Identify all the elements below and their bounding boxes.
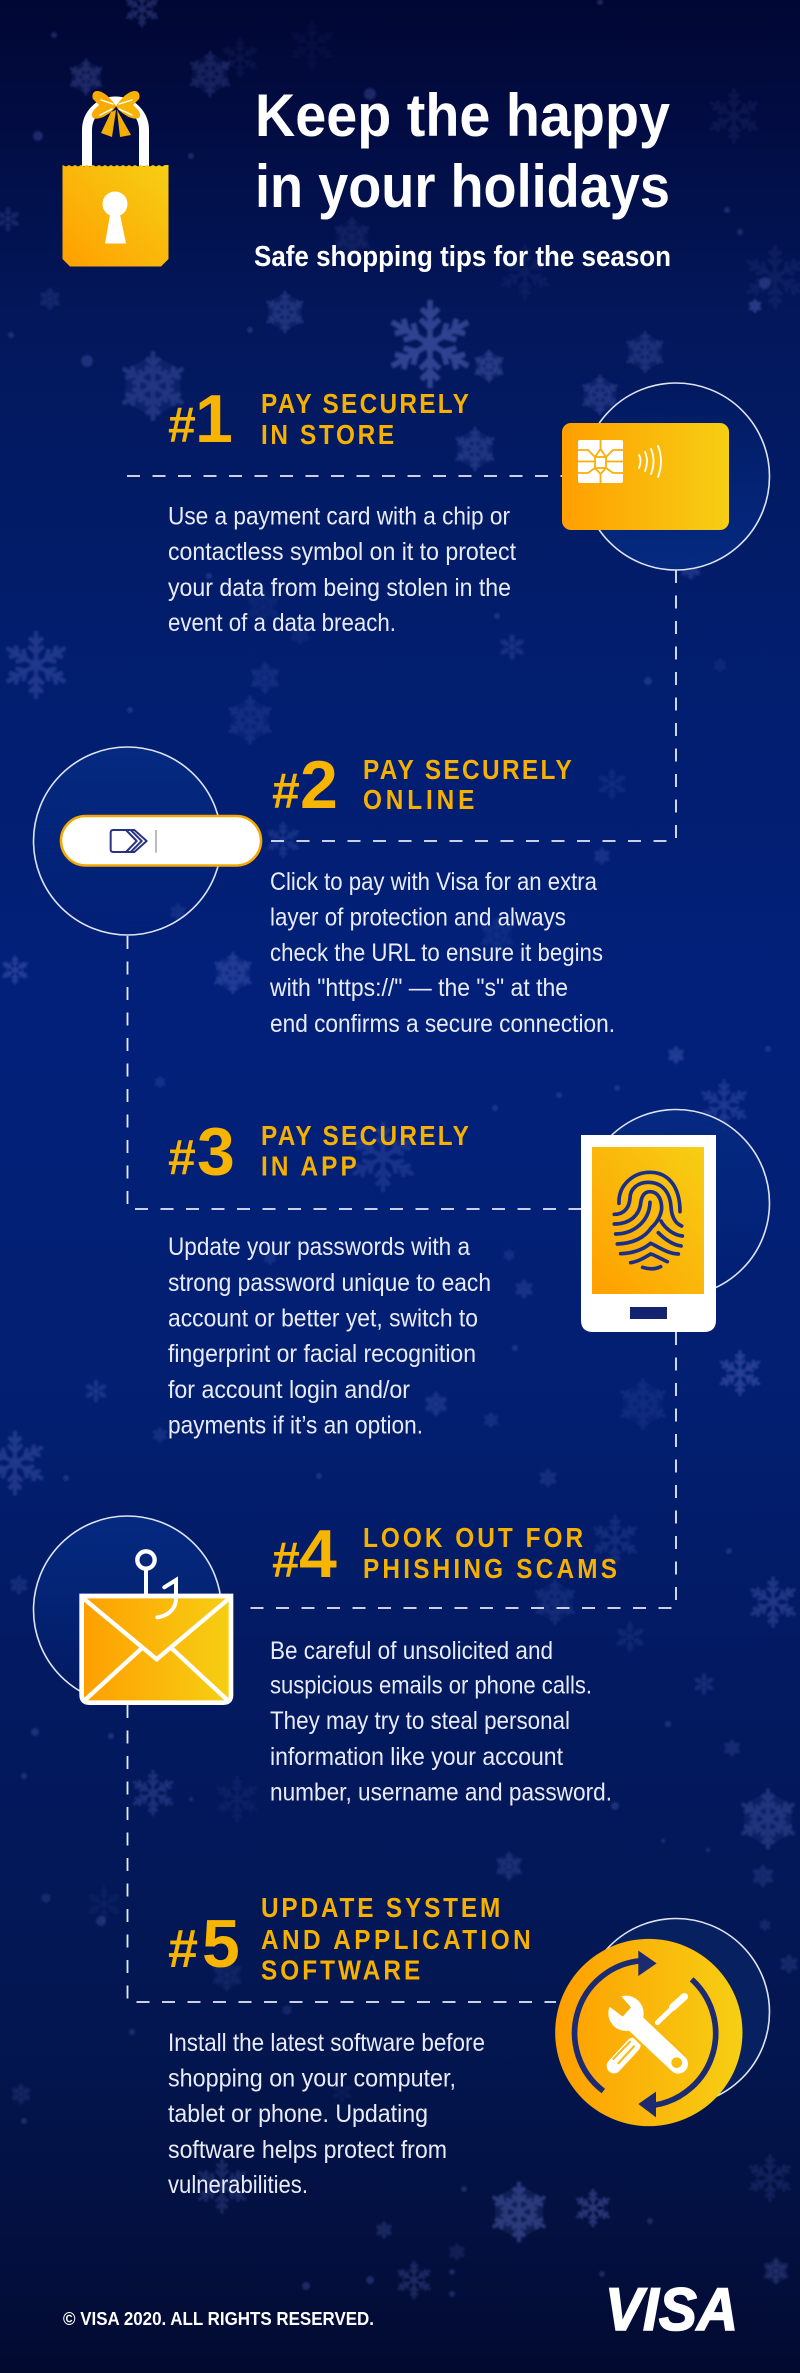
icon: circle outline 2 (34, 747, 222, 935)
number 4 (272, 1516, 337, 1592)
icon: circle outline 5 (582, 1918, 770, 2106)
body text 5 (168, 2029, 485, 2199)
panel: tip 2 pay securely online (34, 747, 615, 1038)
body text 4: Be careful of unsolicited and (270, 1637, 553, 1665)
body text 5: Install the latest software before (168, 2029, 485, 2057)
heading 5: AND APPLICATION (261, 1923, 531, 1955)
subtitle: Safe shopping tips for the season (254, 241, 671, 273)
body text 1: Use a payment card with a chip or (168, 502, 510, 530)
icon: update tools (555, 1939, 742, 2126)
body text 3: account or better yet, switch to (168, 1304, 478, 1332)
body text 5: shopping on your computer, (168, 2064, 456, 2092)
number 5 (168, 1906, 240, 1982)
body text 3 (168, 1233, 491, 1440)
body text 4 (270, 1637, 612, 1806)
body text 5: vulnerabilities. (168, 2171, 308, 2199)
body text 1 (168, 502, 516, 637)
number 1 (168, 381, 233, 457)
number 1: 1 (195, 381, 233, 457)
body text 3: strong password unique to each (168, 1269, 491, 1297)
body text 2: end confirms a secure connection. (270, 1010, 615, 1038)
body text 4: information like your account (270, 1743, 563, 1771)
icon: click to pay field (61, 816, 261, 866)
body text 4: number, username and password. (270, 1778, 612, 1806)
body text 2: check the URL to ensure it begins (270, 939, 603, 967)
icon: circle outline 4 (34, 1516, 222, 1704)
icon: circle outline 3 (582, 1110, 770, 1296)
heading 3 (261, 1119, 469, 1182)
body text 2: layer of protection and always (270, 904, 566, 932)
number 4: # (272, 1532, 300, 1588)
heading 2 (363, 753, 572, 815)
panel: tip 5 update system and application software (168, 1891, 770, 2199)
number 2: # (272, 763, 300, 819)
heading 4: PHISHING SCAMS (363, 1552, 617, 1584)
body text 3: for account login and/or (168, 1376, 410, 1404)
wrench (607, 1987, 682, 2068)
body text 1: contactless symbol on it to protect (168, 538, 516, 566)
dashed connector path (127, 476, 676, 2002)
heading 4: LOOK OUT FOR (363, 1521, 583, 1553)
panel: tip 4 look out for phishing scams (34, 1516, 617, 1806)
body text 5: software helps protect from (168, 2136, 447, 2164)
icon: payment card (562, 423, 729, 530)
body text 4: suspicious emails or phone calls. (270, 1672, 592, 1700)
heading 5 (261, 1891, 531, 1986)
panel: tip 3 pay securely in app (168, 1110, 770, 1440)
heading 5: UPDATE SYSTEM (261, 1891, 500, 1923)
body text 3: Update your passwords with a (168, 1233, 470, 1261)
panel: tip 1 pay securely in store (168, 381, 770, 637)
heading 1: PAY SECURELY (261, 387, 469, 419)
heading 4 (363, 1521, 617, 1584)
body text 4: They may try to steal personal (270, 1707, 570, 1735)
icon: phishing envelope (82, 1551, 231, 1703)
title (255, 82, 671, 220)
body text 2: Click to pay with Visa for an extra (270, 868, 597, 896)
icon: gift bow (92, 91, 140, 137)
number 3: # (168, 1130, 196, 1186)
icon: circle outline 1 (582, 383, 770, 570)
number 1: # (168, 397, 196, 453)
heading 3: IN APP (261, 1150, 357, 1182)
body text 1: your data from being stolen in the (168, 574, 511, 602)
heading 1: IN STORE (261, 418, 394, 450)
heading 3: PAY SECURELY (261, 1119, 469, 1151)
body text 2: with "https://" — the "s" at the (269, 974, 568, 1002)
body text 3: fingerprint or facial recognition (168, 1340, 476, 1368)
icon: phone with fingerprint (581, 1135, 716, 1332)
heading 5: SOFTWARE (261, 1954, 420, 1986)
number 5: # (168, 1919, 198, 1979)
icon: shopping bag padlock (62, 91, 168, 266)
heading 2: ONLINE (363, 783, 474, 815)
number 5: 5 (202, 1906, 240, 1982)
title: Keep the happy (255, 82, 671, 149)
number 2 (272, 747, 338, 823)
number 3 (168, 1114, 235, 1190)
number 2: 2 (300, 747, 338, 823)
number 3: 3 (197, 1114, 235, 1190)
body text 1: event of a data breach. (168, 609, 396, 637)
footer copyright: © VISA 2020. ALL RIGHTS RESERVED. (63, 2309, 374, 2329)
heading 2: PAY SECURELY (363, 753, 572, 785)
body text 2 (269, 868, 615, 1038)
screwdriver (613, 1997, 684, 2066)
visa logo: VISA (605, 2276, 738, 2343)
body text 5: tablet or phone. Updating (168, 2100, 428, 2128)
heading 1 (261, 387, 469, 450)
title: in your holidays (255, 153, 670, 220)
number 4: 4 (299, 1516, 337, 1592)
body text 3: payments if it’s an option. (168, 1412, 423, 1440)
